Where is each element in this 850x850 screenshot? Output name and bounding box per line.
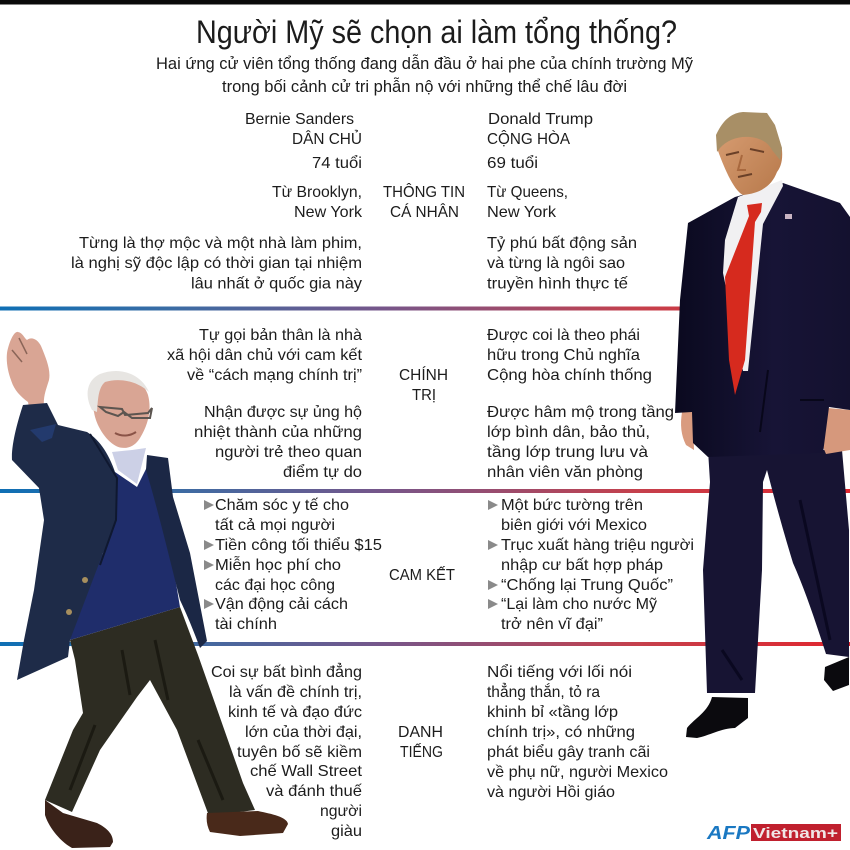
trump tie [725, 203, 762, 395]
Sanders reputation text: tuyên bố sẽ kiềm [237, 744, 362, 761]
row label: politics [399, 365, 448, 404]
logo: AFP Vietnam+ [706, 823, 841, 843]
photo: Donald Trump [675, 112, 850, 738]
Sanders reputation text: Coi sự bất bình đẳng [211, 662, 362, 681]
Sanders reputation text: kinh tế và đạo đức [228, 704, 362, 721]
candidate column: Donald Trump, personal info [487, 111, 637, 292]
divider: personal info / politics [0, 306, 850, 310]
subtitle: trong bối cảnh cử tri phẫn nộ với những thể chế lâu đời [222, 77, 627, 96]
candidate column: Bernie Sanders, personal info: DÂN CHỦ [292, 129, 362, 148]
Sanders politics text [167, 327, 363, 481]
Trump commitments list: “Chống lại Trung Quốc” [501, 577, 673, 594]
Sanders commitments list [204, 497, 382, 633]
Trump politics text [487, 327, 674, 481]
subtitle [156, 54, 693, 96]
Trump reputation text: Nổi tiếng với lối nói [487, 663, 632, 681]
candidate column: Bernie Sanders, personal info: lâu nhất ở quốc gia này [191, 276, 362, 292]
Trump commitments list: biên giới với Mexico [501, 517, 647, 534]
trousers [45, 607, 255, 816]
trump shoes [686, 697, 748, 738]
Sanders reputation text: chế Wall Street [250, 763, 363, 780]
Sanders politics text: điểm tự do [283, 463, 362, 481]
candidate column: Donald Trump, personal info: Từ Queens, [487, 184, 568, 201]
logo: AFP Vietnam+: AFP [706, 823, 751, 843]
subtitle: Hai ứng cử viên tổng thống đang dẫn đầu ở hai phe của chính trường Mỹ [156, 54, 693, 73]
head [90, 373, 150, 448]
candidate column: Bernie Sanders, personal info: là nghị sỹ độc lập có thời gian tại nhiệm [71, 255, 362, 272]
sweater [70, 465, 180, 640]
Sanders commitments list: Chăm sóc y tế cho [215, 497, 349, 514]
row label: personal info [383, 182, 465, 221]
Trump commitments list: trở nên vĩ đại” [501, 616, 603, 633]
trump face [717, 128, 782, 195]
Sanders politics text: Tự gọi bản thân là nhà [199, 327, 362, 344]
row label: personal info: CÁ NHÂN [390, 202, 459, 221]
candidate column: Bernie Sanders, personal info: 74 tuổi [312, 154, 362, 172]
row label: reputation: TIẾNG [400, 742, 443, 761]
candidate column: Bernie Sanders, personal info: Từng là thợ mộc và một nhà làm phim, [79, 235, 362, 252]
Sanders politics text: nhiệt thành của những [194, 424, 362, 441]
Sanders reputation text: là vấn đề chính trị, [229, 684, 362, 701]
shoes [45, 800, 113, 848]
logo: AFP Vietnam+: Vietnam+ [753, 825, 838, 842]
Sanders reputation text: giàu [331, 823, 362, 840]
row label: politics: TRỊ [412, 387, 436, 404]
Sanders reputation text: lớn của thời đại, [245, 724, 362, 741]
Trump reputation text: thẳng thắn, tỏ ra [487, 682, 600, 701]
Trump politics text: Được hâm mộ trong tầng [487, 404, 674, 421]
row label: politics: CHÍNH [399, 365, 448, 384]
Trump reputation text [487, 663, 668, 801]
lapel pin [785, 214, 792, 219]
shirt collar [112, 448, 146, 484]
Trump commitments list: nhập cư bất hợp pháp [501, 557, 663, 574]
trump suit jacket [675, 183, 850, 457]
Trump commitments list: Trục xuất hàng triệu người [501, 537, 694, 554]
candidate column: Donald Trump, personal info: Donald Trump [488, 111, 593, 128]
Sanders politics text: người trẻ theo quan [215, 444, 362, 461]
Sanders reputation text: người [320, 803, 362, 820]
Sanders commitments list: Tiền công tối thiểu $15 [215, 536, 382, 554]
raised hand [7, 332, 49, 424]
row label: reputation: DANH [398, 724, 443, 741]
row label: personal info: THÔNG TIN [383, 182, 465, 201]
trump trousers [703, 450, 849, 693]
trump shirt [723, 180, 783, 371]
Sanders politics text: xã hội dân chủ với cam kết [167, 347, 363, 364]
candidate column: Bernie Sanders, personal info: Từ Brooklyn, [272, 184, 362, 201]
candidate column: Donald Trump, personal info: New York [487, 204, 557, 221]
Sanders commitments list: Miễn học phí cho [215, 555, 341, 574]
trump hands [681, 412, 694, 450]
blazer [12, 403, 117, 680]
Trump reputation text: phát biểu gây tranh cãi [487, 743, 650, 761]
candidate column: Donald Trump, personal info: và từng là ngôi sao [487, 255, 625, 272]
Trump politics text: hữu trong Chủ nghĩa [487, 347, 640, 364]
Trump reputation text: và người Hồi giáo [487, 784, 615, 801]
candidate column: Donald Trump, personal info: truyền hình thực tế [487, 276, 628, 292]
Trump reputation text: về phụ nữ, người Mexico [487, 764, 668, 781]
Trump commitments list: “Lại làm cho nước Mỹ [501, 596, 657, 613]
Sanders commitments list: tài chính [215, 616, 277, 633]
Trump politics text: nhân viên văn phòng [487, 464, 643, 481]
Trump commitments list: Một bức tường trên [501, 497, 643, 514]
divider: politics / commitments [0, 489, 850, 493]
photo: Bernie Sanders [7, 332, 288, 848]
divider: commitments / reputation [0, 642, 850, 646]
Trump politics text: lớp bình dân, bảo thủ, [487, 424, 650, 441]
top bar [0, 0, 850, 4]
Sanders commitments list: Vận động cải cách [215, 596, 348, 613]
Sanders reputation text [211, 662, 363, 840]
title: Người Mỹ sẽ chọn ai làm tổng thống? [196, 14, 677, 50]
Trump commitments list [488, 497, 694, 633]
row label: reputation [398, 724, 443, 761]
Trump politics text: Được coi là theo phái [487, 327, 640, 344]
glasses [100, 407, 152, 418]
candidate column: Bernie Sanders, personal info [71, 111, 363, 292]
Sanders politics text: Nhận được sự ủng hộ [204, 404, 362, 421]
Sanders commitments list: tất cả mọi người [215, 517, 335, 534]
Trump politics text: Cộng hòa chính thống [487, 367, 652, 384]
trump hair [716, 112, 782, 160]
Trump reputation text: khinh bỉ «tầng lớp [487, 704, 618, 721]
Sanders reputation text: và đánh thuế [266, 783, 362, 800]
Trump reputation text: chính trị», có những [487, 724, 635, 741]
candidate column: Bernie Sanders, personal info: Bernie Sanders [245, 111, 354, 128]
candidate column: Donald Trump, personal info: 69 tuổi [487, 154, 538, 172]
candidate column: Bernie Sanders, personal info: New York [294, 204, 363, 221]
Trump politics text: tầng lớp trung lưu và [487, 444, 648, 461]
Sanders politics text: về “cách mạng chính trị” [187, 367, 362, 384]
candidate column: Donald Trump, personal info: Tỷ phú bất động sản [487, 235, 637, 252]
row label: commitments: CAM KẾT [389, 565, 455, 584]
Sanders commitments list: các đại học công [215, 577, 335, 594]
candidate column: Donald Trump, personal info: CỘNG HÒA [487, 129, 570, 148]
